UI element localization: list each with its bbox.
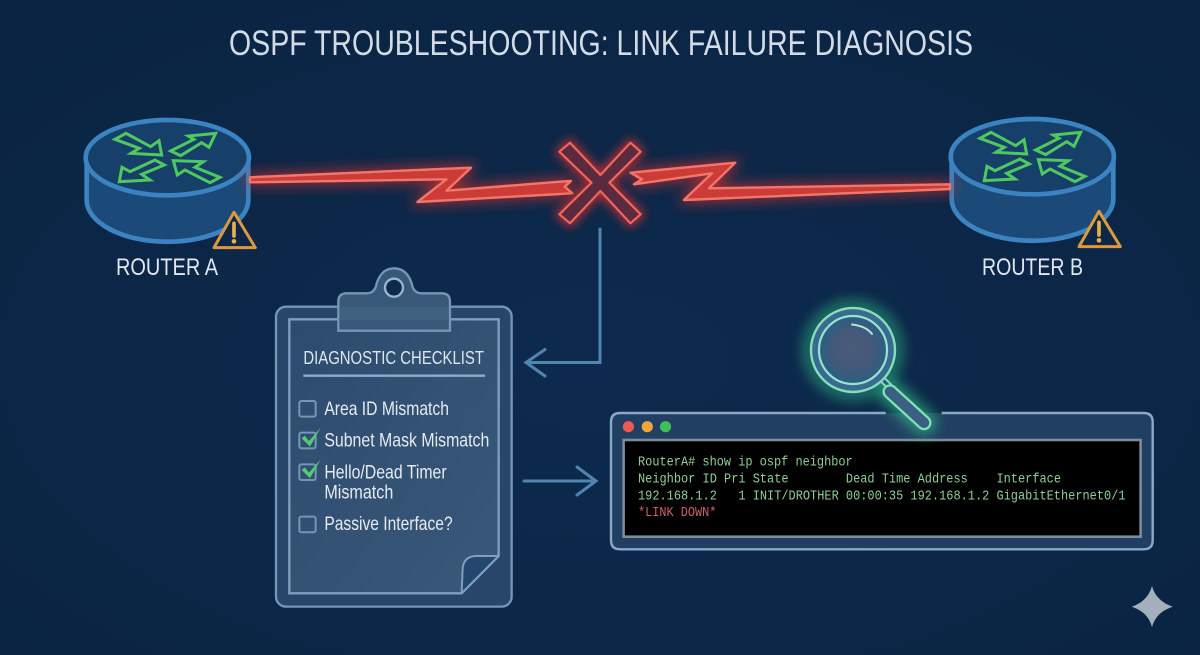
router A bbox=[86, 120, 255, 281]
window controls bbox=[623, 421, 671, 432]
terminal output bbox=[638, 455, 1126, 521]
checklist item: passive interface: Passive Interface? bbox=[324, 514, 453, 535]
broken link bolt: right bbox=[630, 163, 950, 200]
broken link bolt: left bbox=[250, 168, 572, 202]
checklist item: hello/dead timer: Mismatch bbox=[324, 482, 393, 503]
title: OSPF TROUBLESHOOTING: LINK FAILURE DIAGNOSIS bbox=[229, 24, 973, 63]
icon: sparkle watermark bbox=[1132, 586, 1173, 627]
clipboard clip bbox=[338, 268, 450, 331]
terminal output: RouterA# show ip ospf neighbor bbox=[638, 455, 853, 471]
icon: router B warning bbox=[1079, 211, 1120, 247]
checklist item: subnet mask bbox=[299, 428, 489, 452]
checklist item: hello/dead timer: Hello/Dead Timer bbox=[324, 462, 447, 483]
checklist item: hello/dead timer bbox=[299, 459, 447, 503]
terminal output: Neighbor ID Pri State Dead Time Address Interface bbox=[638, 471, 1061, 487]
icon: magnifying glass bbox=[809, 306, 924, 423]
clipboard fold bbox=[462, 556, 499, 593]
router B body bbox=[951, 119, 1114, 241]
checklist item: area ID: Area ID Mismatch bbox=[324, 399, 449, 420]
terminal output: 192.168.1.2 1 INIT/DROTHER 00:00:35 192.168.1.2 GigabitEthernet0/1 bbox=[638, 488, 1126, 504]
checklist heading: DIAGNOSTIC CHECKLIST bbox=[303, 347, 484, 368]
terminal output: *LINK DOWN* bbox=[638, 505, 716, 521]
icon: router A warning bbox=[214, 212, 255, 248]
checklist item: passive interface bbox=[299, 514, 453, 535]
arrow: checklist to terminal bbox=[524, 467, 596, 495]
terminal screen bbox=[624, 440, 1141, 537]
checklist item: area ID bbox=[299, 399, 449, 420]
panel: diagnostic checklist clipboard bbox=[276, 268, 512, 607]
panel: terminal window bbox=[611, 413, 1153, 549]
label: router B: ROUTER B bbox=[982, 254, 1083, 281]
router A body bbox=[86, 120, 249, 242]
label: router A: ROUTER A bbox=[116, 254, 218, 281]
arrow: failure to checklist bbox=[526, 229, 600, 376]
checklist item: subnet mask: Subnet Mask Mismatch bbox=[324, 431, 489, 452]
icon: red X failure mark bbox=[559, 143, 641, 223]
router B bbox=[951, 119, 1120, 281]
